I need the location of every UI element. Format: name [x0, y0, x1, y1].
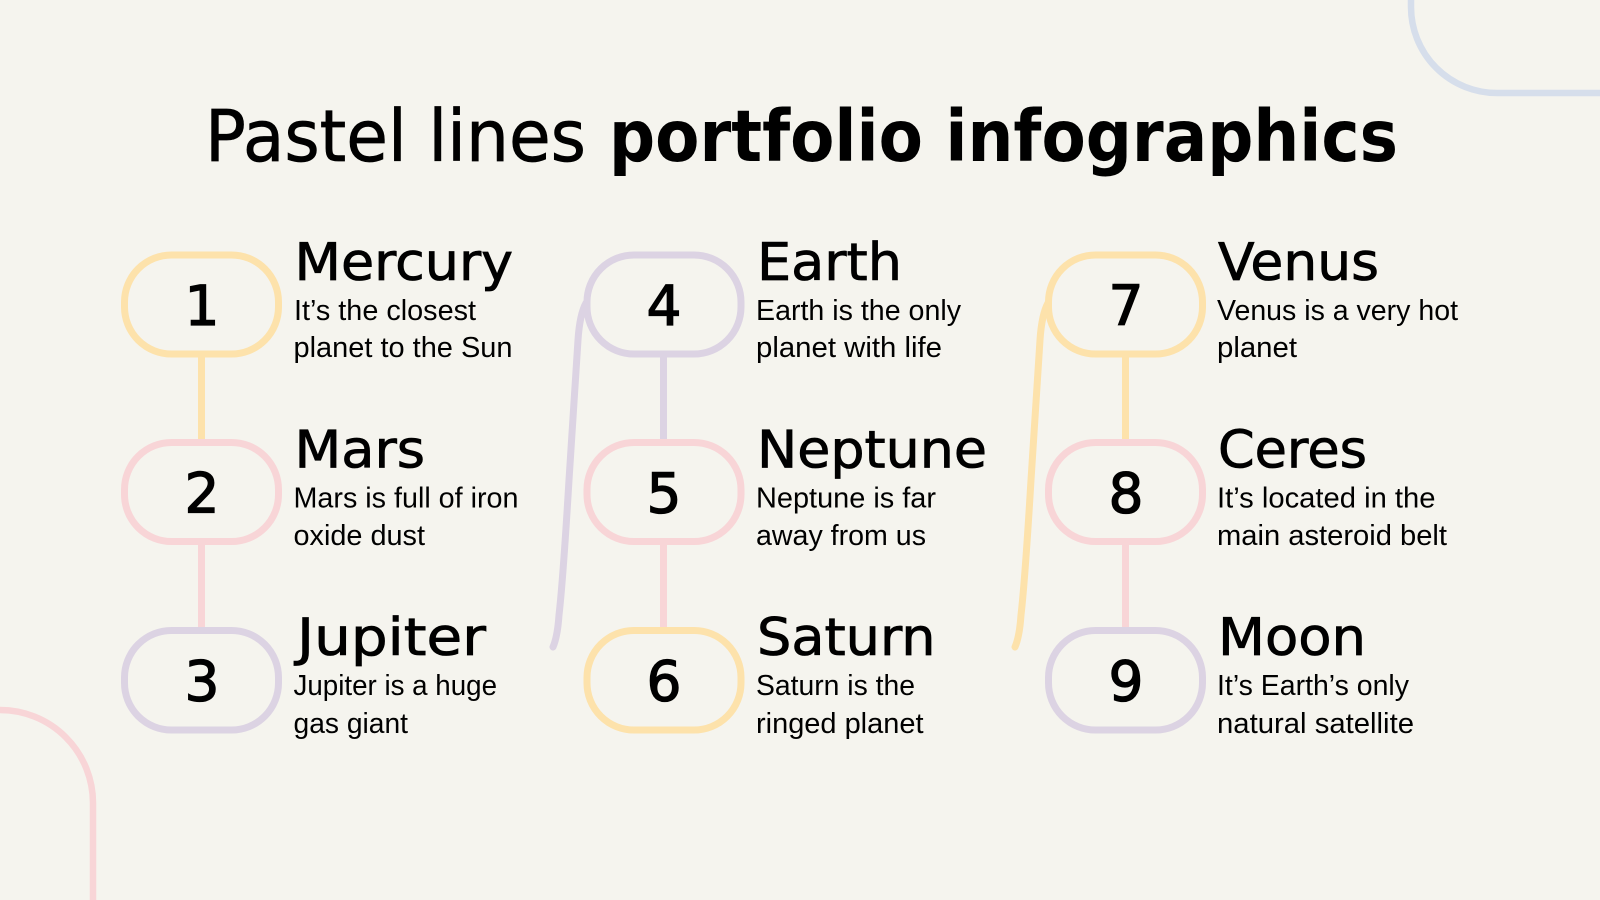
heading: Mercury: Mercury — [294, 233, 513, 293]
panel: step 7 Venus — [1048, 233, 1458, 364]
number pill 2: 2 — [184, 462, 220, 526]
number pill 7 — [1048, 255, 1202, 354]
description: Mars — [294, 482, 518, 552]
description: Neptune: Neptune is far — [756, 482, 936, 514]
number pill 4 — [587, 255, 741, 354]
description: Saturn: Saturn is the — [756, 670, 915, 702]
number pill 9: 9 — [1108, 650, 1144, 714]
description: Mars: Mars is full of iron — [294, 482, 518, 514]
description: Ceres — [1217, 482, 1447, 552]
heading: Earth: Earth — [757, 233, 902, 293]
description: Jupiter: gas giant — [294, 708, 408, 740]
panel: step 9 Moon — [1048, 608, 1414, 740]
panel: step 3 Jupiter — [124, 608, 497, 740]
heading: Saturn: Saturn — [757, 608, 936, 668]
description: Ceres: It’s located in the — [1217, 482, 1436, 514]
connector: 2 to 3 — [198, 541, 205, 630]
curved connector: column 2 to column 3 — [1015, 303, 1048, 647]
connector: 4 to 5 — [660, 354, 667, 442]
description: Moon — [1217, 670, 1414, 740]
curved connector: column 1 to column 2 — [553, 303, 586, 647]
description: Venus: planet — [1217, 332, 1297, 364]
title — [205, 95, 1398, 178]
heading: Ceres: Ceres — [1218, 420, 1367, 480]
number pill 1: 1 — [184, 274, 220, 338]
heading: Mars: Mars — [294, 420, 425, 480]
connector: 1 to 2 — [198, 354, 205, 442]
number pill 8: 8 — [1108, 462, 1144, 526]
number pill 5: 5 — [646, 462, 682, 526]
description: Jupiter: Jupiter is a huge — [294, 670, 497, 702]
description: Earth: Earth is the only — [756, 295, 961, 327]
description: Earth: planet with life — [756, 332, 942, 364]
number pill 6: 6 — [646, 650, 682, 714]
number pill 3: 3 — [184, 650, 220, 714]
description: Jupiter — [294, 670, 497, 740]
number pill 2 — [124, 442, 278, 542]
connector: 7 to 8 — [1122, 354, 1129, 442]
description: Venus — [1217, 295, 1458, 364]
number pill 6 — [587, 630, 741, 730]
decorative corner line: bottom left — [0, 710, 93, 900]
description: Neptune — [756, 482, 936, 552]
description: Venus: Venus is a very hot — [1217, 295, 1458, 327]
number pill 7: 7 — [1108, 274, 1144, 338]
number pill 8 — [1048, 442, 1202, 542]
panel: step 1 Mercury — [124, 233, 513, 364]
description: Saturn — [756, 670, 924, 740]
connector: 8 to 9 — [1122, 541, 1129, 630]
heading: Venus: Venus — [1218, 233, 1379, 293]
heading: Neptune: Neptune — [757, 420, 987, 480]
heading: Jupiter: Jupiter — [294, 608, 487, 668]
title: portfolio infographics — [609, 95, 1398, 178]
panel: step 2 Mars — [124, 420, 518, 552]
title: Pastel lines — [205, 95, 586, 178]
number pill 1 — [124, 255, 278, 354]
description: Neptune: away from us — [756, 520, 926, 552]
description: Mercury: planet to the Sun — [294, 332, 512, 364]
description: Saturn: ringed planet — [756, 708, 924, 740]
description: Moon: natural satellite — [1217, 708, 1414, 740]
description: Ceres: main asteroid belt — [1217, 520, 1447, 552]
panel: step 4 Earth — [587, 233, 961, 364]
description: Earth — [756, 295, 961, 364]
number pill 4: 4 — [646, 274, 682, 338]
decorative corner line: top right — [1411, 0, 1600, 93]
panel: step 6 Saturn — [587, 608, 936, 740]
connector: 5 to 6 — [660, 541, 667, 630]
description: Mars: oxide dust — [294, 520, 425, 552]
panel: step 8 Ceres — [1048, 420, 1447, 552]
description: Mercury — [294, 295, 512, 364]
panel: step 5 Neptune — [587, 420, 987, 552]
description: Mercury: It’s the closest — [294, 295, 476, 327]
description: Moon: It’s Earth’s only — [1217, 670, 1409, 702]
number pill 5 — [587, 442, 741, 542]
number pill 9 — [1048, 630, 1202, 730]
number pill 3 — [124, 630, 278, 730]
heading: Moon: Moon — [1218, 608, 1366, 668]
